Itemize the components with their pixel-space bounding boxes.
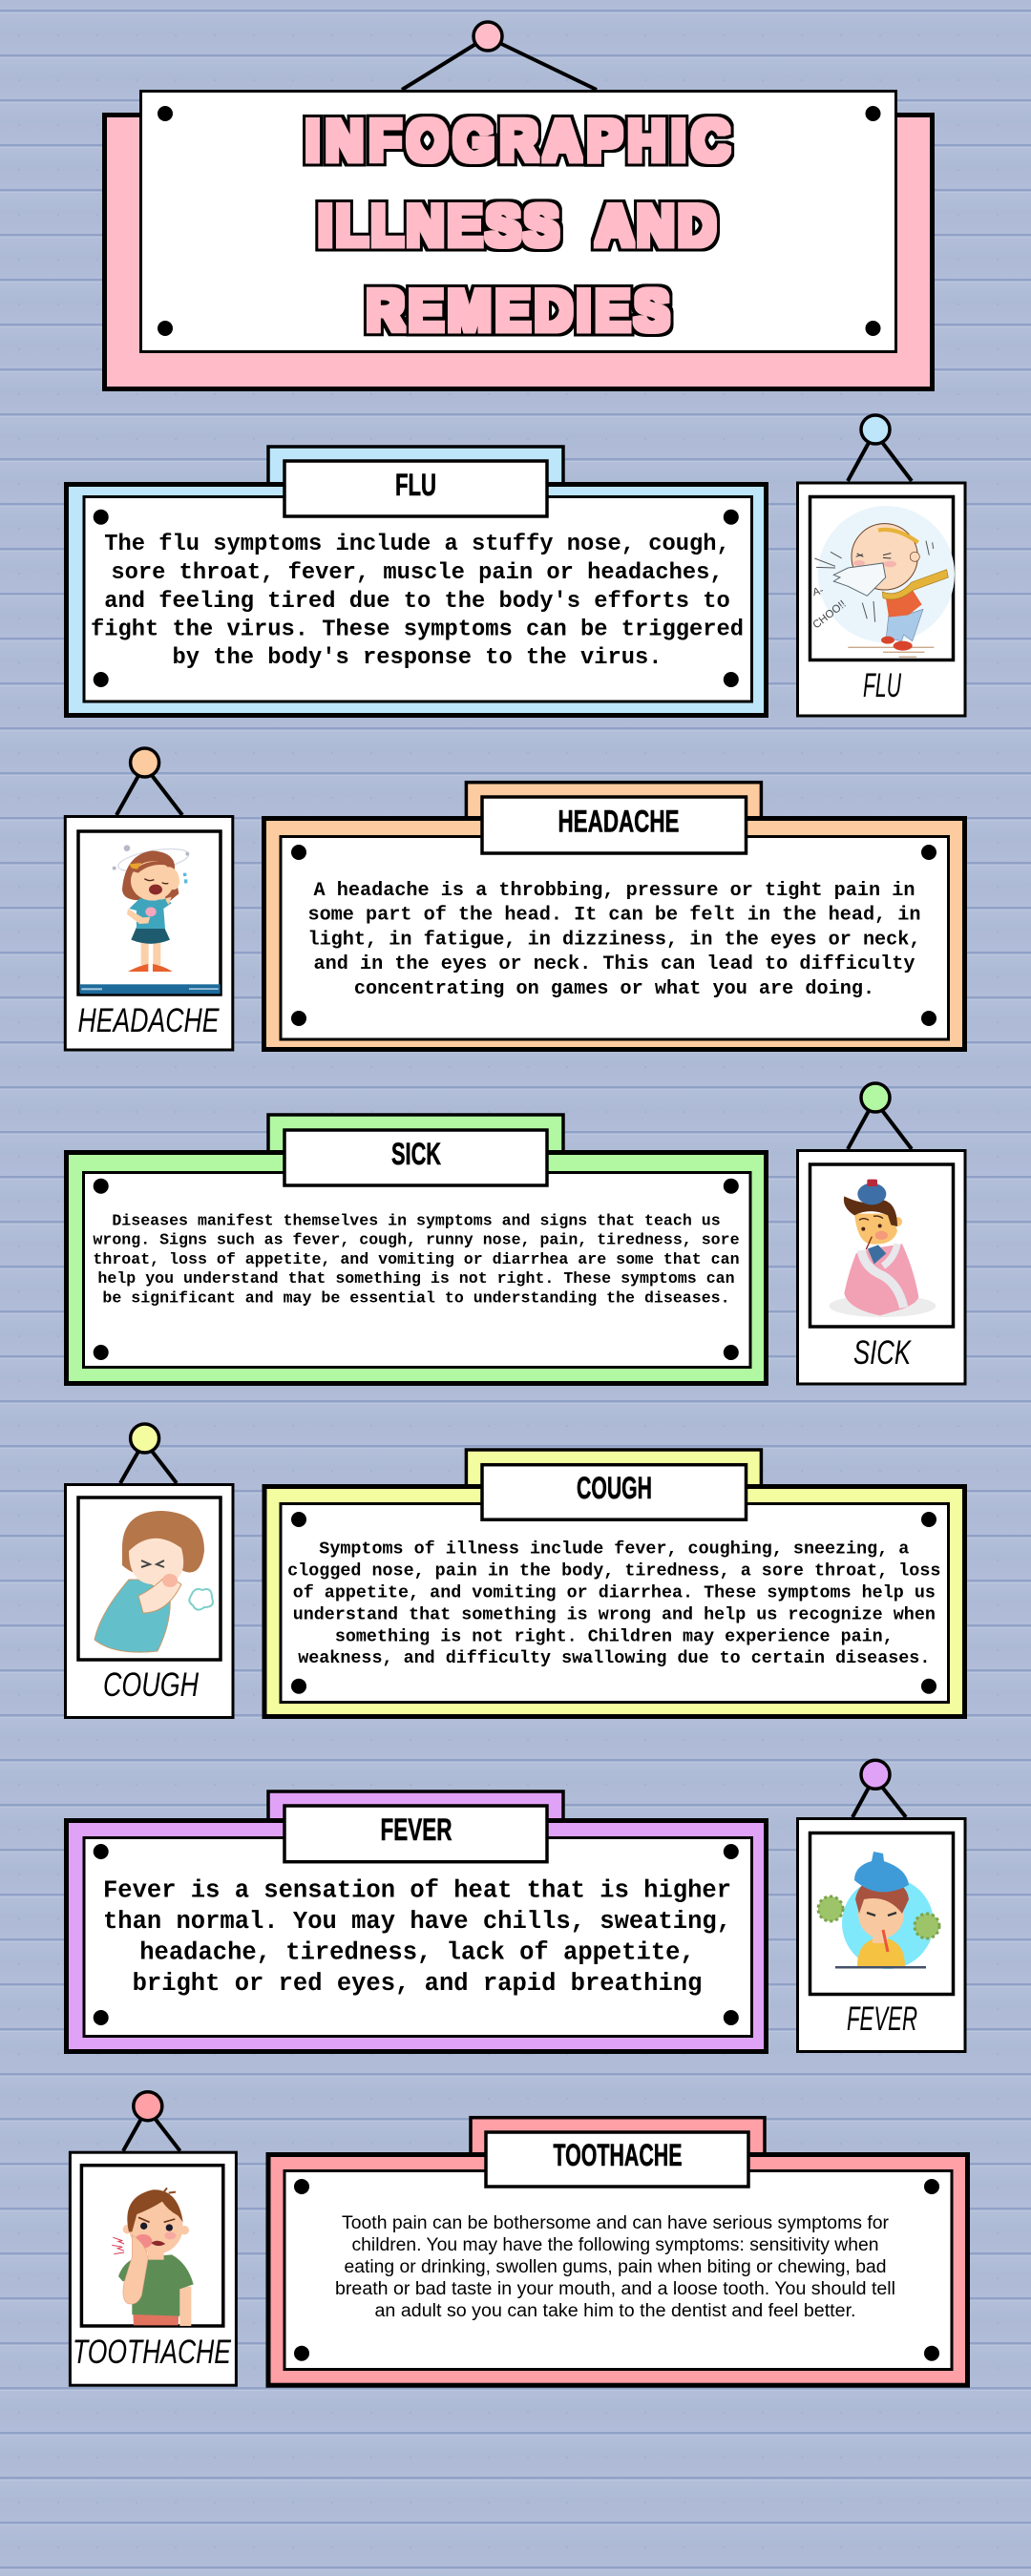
white body	[281, 836, 949, 1039]
body text: clogged nose, pain in the body, tiredness, a sore throat, loss	[287, 1561, 940, 1581]
heading tab	[284, 1806, 547, 1862]
colored frame	[268, 2155, 968, 2385]
icon: sick child in blanket	[829, 1180, 936, 1317]
body text: and feeling tired due to the body's efforts to	[104, 589, 730, 615]
body text: The flu symptoms include a stuffy nose, cough,	[104, 532, 730, 557]
picture frame	[810, 1164, 953, 1327]
heading tab	[486, 2132, 748, 2187]
tab back	[268, 1115, 563, 1162]
pin	[131, 748, 159, 777]
body text: fight the virus. These symptoms can be triggered	[91, 617, 744, 643]
body text: Symptoms of illness include fever, coughing, sneezing, a	[319, 1539, 909, 1560]
body text: Fever is a sensation of heat that is higher	[103, 1877, 731, 1905]
panel: headache	[263, 783, 964, 1050]
label: SICK	[853, 1334, 912, 1372]
card: headache picture	[65, 748, 233, 1050]
body text	[91, 532, 744, 671]
dots	[94, 510, 739, 687]
dots	[94, 1179, 739, 1360]
panel: sick	[67, 1115, 766, 1384]
body text: help you understand that something is not right. These symptoms can	[97, 1269, 735, 1288]
pin	[861, 1760, 890, 1789]
card: sick picture	[798, 1083, 965, 1384]
icon: child with toothache	[112, 2188, 194, 2326]
body text: breath or bad taste in your mouth, and a loose tooth. You should tell	[335, 2279, 895, 2299]
body text: A headache is a throbbing, pressure or tight pain in	[314, 880, 915, 902]
icon: girl with headache	[80, 845, 221, 994]
body text: light, in fatigue, in dizziness, in the eyes or neck,	[307, 929, 921, 951]
hanging strings	[402, 40, 597, 90]
heading: COUGH	[577, 1471, 652, 1505]
label: COUGH	[103, 1666, 200, 1704]
body text	[287, 1539, 940, 1668]
picture frame	[81, 2166, 223, 2326]
pin	[131, 1424, 159, 1453]
body text: something is not right. Children may experience pain,	[335, 1626, 894, 1646]
heading: HEADACHE	[558, 804, 680, 838]
colored frame	[67, 1153, 766, 1384]
dots	[291, 845, 936, 1026]
body text: throat, loss of appetite, and vomiting or diarrhea are some that can	[93, 1250, 740, 1268]
heading tab	[482, 1465, 747, 1519]
strings	[123, 2117, 180, 2151]
label: TOOTHACHE	[73, 2334, 231, 2371]
white body	[281, 1504, 949, 1703]
dots	[294, 2179, 939, 2361]
dots	[94, 1844, 739, 2025]
body text: understand that something is wrong and help us recognize when	[293, 1604, 936, 1624]
pink back panel	[105, 115, 932, 389]
strings	[852, 1786, 906, 1817]
heading tab	[482, 797, 747, 853]
tab back	[268, 1791, 563, 1839]
tab back	[466, 1450, 761, 1497]
pin	[134, 2092, 162, 2121]
card: fever picture	[798, 1760, 965, 2052]
strings	[120, 1450, 177, 1483]
card	[70, 2152, 236, 2385]
body text: be significant and may be essential to understanding the diseases.	[102, 1288, 730, 1308]
colored frame	[67, 485, 766, 716]
card	[798, 483, 965, 716]
dots	[291, 1512, 936, 1694]
icon: child sneezing: CHOO!!	[810, 598, 849, 631]
body text: an adult so you can take him to the dentist and feel better.	[374, 2301, 855, 2321]
colored frame	[264, 1487, 964, 1716]
body text: Tooth pain can be bothersome and can have serious symptoms for	[342, 2213, 890, 2233]
heading tab	[284, 1130, 547, 1185]
title: INFOGRAPHIC	[305, 110, 729, 174]
body text: Diseases manifest themselves in symptoms and signs that teach us	[112, 1212, 721, 1229]
body text: weakness, and difficulty swallowing due to certain diseases.	[298, 1648, 930, 1668]
body text: by the body's response to the virus.	[172, 645, 663, 671]
title: ILLNESS AND	[318, 195, 716, 259]
heading: FEVER	[380, 1812, 452, 1847]
icon: child sneezing	[810, 506, 955, 657]
card: flu picture	[798, 415, 965, 716]
card	[798, 1819, 965, 2052]
body text	[307, 880, 921, 1000]
strings	[848, 441, 912, 481]
heading: TOOTHACHE	[554, 2138, 682, 2172]
body text: than normal. You may have chills, sweating,	[103, 1908, 731, 1936]
tab back	[471, 2118, 765, 2166]
card: toothache picture	[70, 2092, 236, 2385]
board dots	[158, 106, 880, 336]
body text: of appetite, and vomiting or diarrhea. These symptoms help us	[293, 1582, 936, 1603]
picture frame	[78, 831, 221, 995]
icon: child coughing	[95, 1511, 213, 1652]
white body	[84, 1838, 752, 2037]
white body	[84, 1172, 750, 1367]
heading: FLU	[395, 468, 436, 502]
label: FLU	[863, 667, 901, 704]
panel: cough	[264, 1450, 964, 1716]
card	[65, 817, 233, 1050]
hanging pin	[473, 22, 502, 51]
icon: child sneezing: A-	[811, 585, 825, 598]
body text: children. You may have the following symptoms: sensitivity when	[351, 2235, 878, 2255]
title	[305, 110, 729, 344]
strings	[116, 774, 182, 815]
card	[798, 1151, 965, 1384]
icon: child with fever	[818, 1852, 939, 1969]
card	[65, 1485, 233, 1718]
label: FEVER	[847, 2000, 917, 2038]
picture frame	[810, 1833, 953, 1995]
strings	[848, 1109, 912, 1149]
white body	[84, 496, 752, 702]
body text: wrong. Signs such as fever, cough, runny nose, pain, tiredness, sore	[93, 1231, 740, 1249]
body text: bright or red eyes, and rapid breathing	[133, 1970, 702, 1998]
body text: some part of the head. It can be felt in the head, in	[307, 905, 921, 927]
white title board	[141, 92, 895, 351]
card: cough picture	[65, 1424, 233, 1718]
label: HEADACHE	[78, 1002, 220, 1039]
white body	[284, 2170, 952, 2369]
body text	[93, 1212, 740, 1308]
body text: eating or drinking, swollen gums, pain when biting or chewing, bad	[344, 2257, 886, 2277]
body text: and in the eyes or neck. This can lead to difficulty	[314, 953, 915, 975]
heading tab	[284, 461, 547, 516]
panel: flu	[67, 447, 766, 716]
body text: sore throat, fever, muscle pain or headaches,	[111, 560, 724, 586]
tab back	[268, 447, 563, 494]
picture frame	[810, 496, 953, 660]
pin	[861, 415, 890, 444]
picture frame	[78, 1497, 221, 1660]
panel: title sign	[105, 22, 932, 389]
body text: concentrating on games or what you are doing.	[354, 978, 874, 1000]
colored frame	[67, 1821, 766, 2052]
title: REMEDIES	[367, 280, 669, 344]
panel: fever	[67, 1791, 766, 2052]
body text: headache, tiredness, lack of appetite,	[139, 1939, 695, 1966]
panel: toothache	[268, 2118, 968, 2385]
body text	[103, 1877, 731, 1998]
colored frame	[263, 819, 964, 1050]
tab back	[466, 783, 761, 830]
pin	[861, 1083, 890, 1112]
heading: SICK	[391, 1137, 441, 1171]
body text	[335, 2213, 895, 2321]
